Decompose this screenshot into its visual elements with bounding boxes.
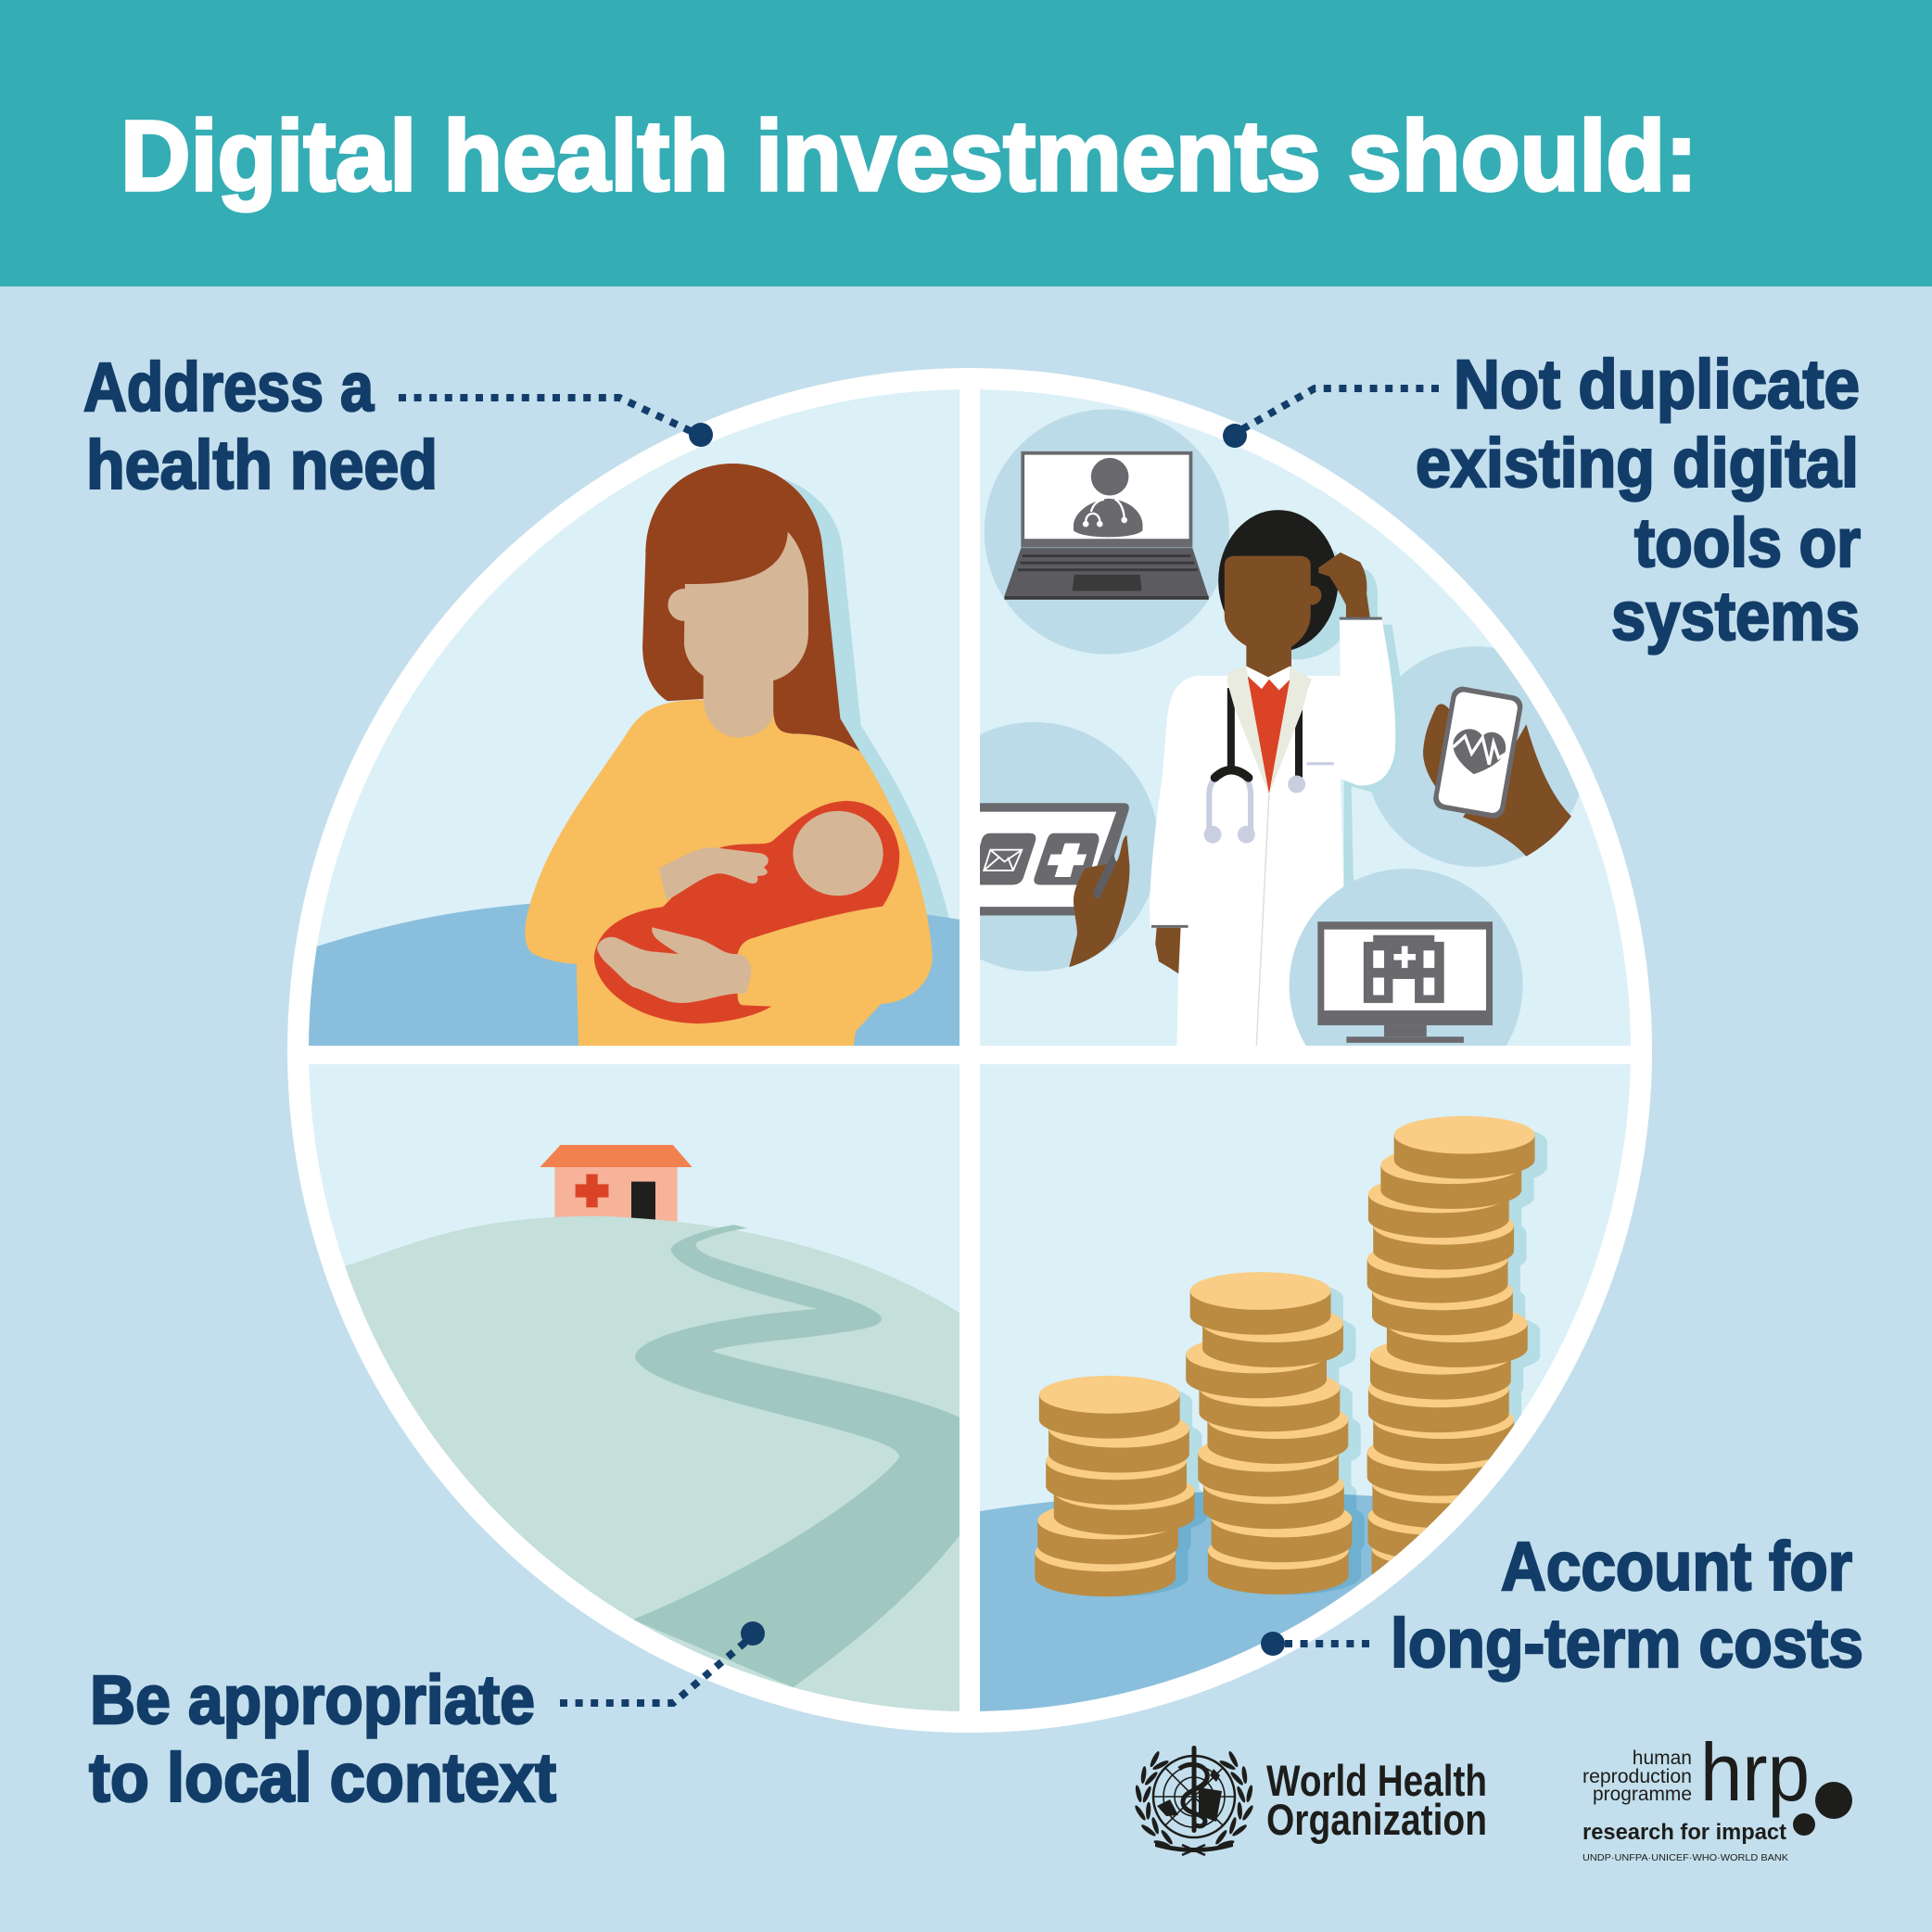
panel: address a health need <box>309 389 960 1046</box>
callout: not duplicate: Not duplicate <box>1454 346 1860 423</box>
blue ground <box>980 1493 1452 1711</box>
header band <box>0 0 1932 286</box>
coin stack: short <box>1035 1376 1195 1596</box>
callout: long-term costs: long-term costs <box>1391 1605 1863 1682</box>
callout: address a health need: Address a <box>83 349 375 426</box>
logo: World Health Organization: Organization <box>1266 1795 1487 1844</box>
icon: hospital monitor <box>1289 869 1522 1046</box>
coin shadows <box>1050 1124 1547 1571</box>
title: Digital health investments should: <box>121 99 1697 211</box>
callout: not duplicate: existing digital <box>1416 425 1859 502</box>
coin shadows on ground <box>1048 1434 1365 1596</box>
logo: human reproduction programme: human <box>1633 1748 1692 1769</box>
logo: human reproduction programme: research for impact <box>1582 1820 1786 1845</box>
logo: human reproduction programme: reproduction <box>1582 1766 1692 1787</box>
logo: human reproduction programme <box>1582 1726 1852 1863</box>
callout: local context: Be appropriate <box>90 1661 535 1738</box>
callout: not duplicate: systems <box>1611 578 1860 655</box>
logo: human reproduction programme: programme <box>1593 1784 1692 1805</box>
logo: human reproduction programme: hrp <box>1700 1726 1810 1818</box>
icon: laptop with remote doctor <box>985 410 1229 655</box>
callout: local context <box>89 1621 765 1816</box>
callout: address a health need: health need <box>86 426 438 503</box>
callout: not duplicate <box>1223 346 1861 655</box>
panel: account for long-term costs <box>980 1064 1631 1711</box>
doctor figure <box>1150 510 1402 1071</box>
white ring and cross <box>287 368 1652 1733</box>
mother holding baby <box>278 464 970 1071</box>
icon: phone in hand <box>1366 646 1586 867</box>
winding road <box>632 1225 971 1687</box>
icon: health clinic <box>540 1145 693 1222</box>
callout: long-term costs: Account for <box>1501 1528 1852 1605</box>
icon: WHO emblem <box>1134 1746 1254 1855</box>
callout: local context: to local context <box>89 1739 556 1816</box>
green hill <box>345 1216 960 1711</box>
callout: not duplicate: tools or <box>1634 504 1861 581</box>
icon: tablet in hand <box>980 722 1156 972</box>
callout: long-term costs <box>1261 1528 1863 1682</box>
panel: appropriate to local context <box>309 1064 960 1711</box>
coin stack: medium <box>1186 1272 1352 1595</box>
logo: human reproduction programme: UNDP·UNFPA·UNICEF·WHO·WORLD BANK <box>1582 1852 1788 1863</box>
logo: World Health Organization <box>1134 1746 1487 1855</box>
logo: World Health Organization: World Health <box>1266 1756 1487 1805</box>
panel: not duplicate existing tools <box>980 389 1631 1046</box>
callout: address a health need <box>83 349 713 503</box>
coin stack: tall <box>1367 1116 1535 1593</box>
